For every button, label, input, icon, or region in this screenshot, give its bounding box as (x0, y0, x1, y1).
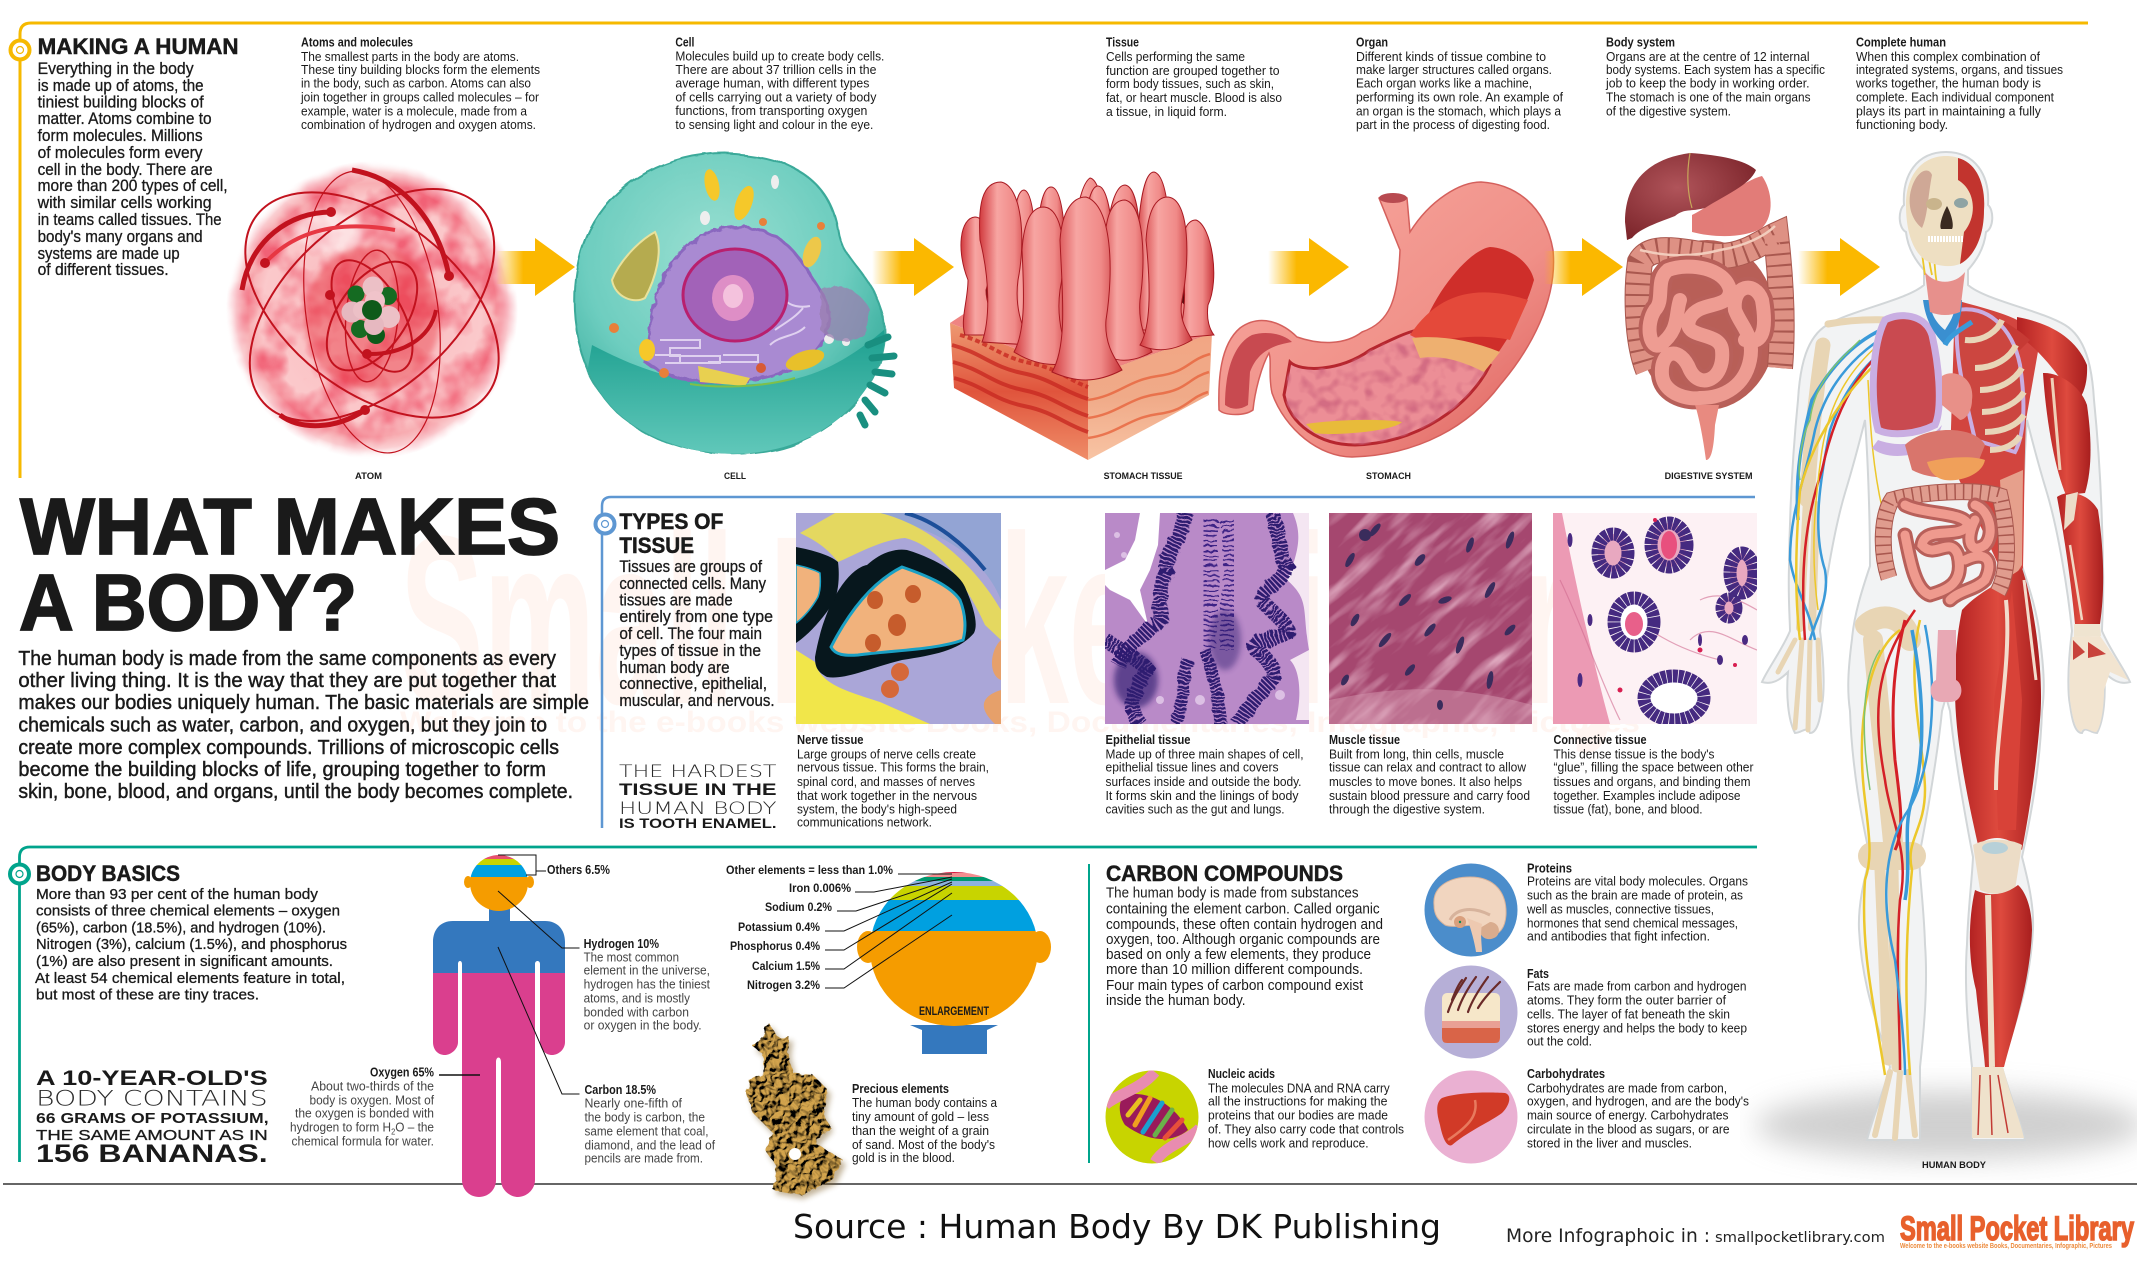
callout: bananas: BODY CONTAINS (36, 1087, 268, 1111)
floor shadow (1755, 1091, 2145, 1159)
photo: nerve tissue (796, 513, 1001, 724)
text block: tissue: Tissue (1106, 36, 1139, 50)
text block: carbohydrates (1527, 1067, 1749, 1150)
panel frame: body basics (10, 847, 1757, 1162)
abdomen organs (1905, 430, 1985, 478)
text block: carbohydrates: stored in the liver and muscles. (1527, 1136, 1692, 1150)
text block: carbohydrates: main source of energy. Carbohydrates (1527, 1108, 1728, 1122)
label: others: Others 6.5% (547, 863, 610, 877)
text block: muscle tissue: through the digestive system. (1329, 803, 1485, 817)
text block: fats: Fats are made from carbon and hydrogen (1527, 980, 1746, 994)
text block: cell: Molecules build up to create body cells. (675, 50, 884, 64)
text block: complete human: functioning body. (1856, 118, 1948, 132)
text block: atoms and molecules: These tiny building blocks form the elements (301, 63, 540, 77)
figure body (433, 908, 565, 1197)
photo: epithelial tissue (1105, 513, 1309, 724)
text block: epithelial tissue: It forms skin and the linings of body (1106, 789, 1299, 803)
main title: WHAT MAKES (20, 482, 560, 571)
text block: organ: an organ is the stomach, which plays a (1356, 105, 1561, 119)
text block: introduction: other living thing. It is the way that they are put together that (18, 670, 556, 692)
text block: proteins: hormones that send chemical messages, (1527, 917, 1738, 931)
text block: making a human intro: form molecules. Millions (38, 127, 203, 145)
text block: carbon compounds: inside the human body. (1106, 993, 1246, 1009)
enlargement labels: Iron 0.006% (789, 883, 851, 895)
icon: DNA (1105, 1070, 1200, 1164)
text block: epithelial tissue (1106, 733, 1304, 817)
text block: carbohydrates: Carbohydrates are made from carbon, (1527, 1082, 1727, 1096)
footer: more infographic link: More Infographoic in : (1506, 1225, 1710, 1247)
colon (1638, 235, 1782, 370)
enlargement neck (910, 1025, 998, 1054)
icon: section marker teal (10, 864, 29, 884)
liver (1625, 153, 1756, 240)
text block: nerve tissue: that work together in the nervous (797, 789, 977, 803)
text block: types of tissue: types of tissue in the (619, 642, 761, 660)
caption: cell: CELL (724, 471, 746, 482)
text block: introduction: makes our bodies uniquely human. The basic materials are simple (18, 692, 589, 714)
text block: making a human intro (37, 60, 228, 279)
text block: tissue (1106, 36, 1282, 119)
text block: atoms and molecules: in the body, such as carbon. Atoms can also (301, 77, 531, 91)
callout lines (439, 855, 580, 1094)
text block: making a human intro: more than 200 types of cell, (38, 177, 228, 195)
caption: stomach tissue: STOMACH TISSUE (1104, 471, 1183, 482)
photo: connective tissue (1553, 513, 1757, 724)
callout: hardest tissue: THE HARDEST (619, 762, 777, 782)
text block: nucleic acids: proteins that our bodies are made (1208, 1108, 1388, 1122)
caption: stomach: STOMACH (1366, 471, 1411, 482)
text block: introduction (18, 648, 589, 803)
text block: atoms and molecules: example, water is a molecule, made from a (301, 105, 527, 119)
label: carbon: pencils are made from. (584, 1152, 703, 1166)
caption: human body: HUMAN BODY (1922, 1160, 1987, 1171)
arrow 3 (1268, 238, 1349, 296)
enlargement labels: Nitrogen 3.2% (747, 980, 820, 992)
label: hydrogen (584, 937, 710, 1032)
heading: types of tissue: TYPES OF (619, 509, 723, 534)
text block: fats (1527, 967, 1747, 1049)
label: carbon: the body is carbon, the (584, 1111, 705, 1125)
label: carbon: diamond, and the lead of (584, 1138, 715, 1152)
enlargement head bands (871, 872, 1037, 1026)
text block: cell: functions, from transporting oxygen (675, 104, 867, 118)
callout: bananas (36, 1067, 269, 1168)
icon: liver (1424, 1070, 1518, 1164)
label: oxygen: Oxygen 65% (370, 1066, 434, 1080)
text block: proteins: well as muscles, connective tissues, (1526, 903, 1714, 917)
label: carbon: same element that coal, (584, 1125, 708, 1139)
footer: more infographic link: smallpocketlibrary.com (1715, 1230, 1885, 1246)
text block: nucleic acids: of. They also carry code that controls (1208, 1122, 1404, 1136)
text block: organ: part in the process of digesting food. (1356, 118, 1550, 132)
text block: making a human intro: Everything in the body (38, 60, 194, 78)
text block: body basics: (65%), carbon (18.5%), and hydrogen (10%). (36, 921, 326, 937)
text block: tissue: form body tissues, such as skin, (1106, 77, 1274, 91)
text block: complete human: plays its part in maintaining a fully (1856, 105, 2042, 119)
text block: precious elements: tiny amount of gold – less (852, 1110, 989, 1124)
text block: introduction: become the building blocks of life, grouping together to form (18, 759, 546, 781)
callout: hardest tissue: HUMAN BODY (619, 799, 776, 819)
text block: body system (1605, 36, 1825, 119)
text block: making a human intro: matter. Atoms combine to (38, 110, 212, 128)
text block: connective tissue: together. Examples include adipose (1554, 789, 1740, 803)
label: hydrogen: element in the universe, (584, 963, 710, 977)
text block: carbohydrates: circulate in the blood as sugars, or are (1527, 1122, 1730, 1136)
enlargement labels: Sodium 0.2% (765, 902, 832, 914)
illustration: cell (570, 153, 900, 470)
text block: precious elements: The human body contains a (852, 1096, 997, 1110)
text block: complete human: integrated systems, organs, and tissues (1856, 63, 2063, 77)
label: oxygen (290, 1066, 434, 1149)
icon: brain (1424, 864, 1518, 956)
text block: precious elements: than the weight of a grain (852, 1124, 989, 1138)
label: hydrogen: atoms, and is mostly (584, 992, 691, 1006)
text block: proteins (1526, 862, 1748, 944)
text block: connective tissue: tissues and organs, and binding them (1554, 775, 1750, 789)
text block: making a human intro: systems are made up (38, 245, 180, 263)
text block: types of tissue: muscular, and nervous. (619, 692, 774, 710)
watermark: Welcome to the e-books website Books, Documentaries, Infographic, Pictures (400, 706, 1640, 739)
text block: body basics (35, 887, 347, 1004)
text block: organ: Organ (1356, 36, 1388, 50)
text block: making a human intro: of molecules form every (38, 144, 203, 162)
enlargement labels: Potassium 0.4% (738, 922, 820, 934)
illustration: stomach (1219, 182, 1554, 457)
text block: atoms and molecules: combination of hydrogen and oxygen atoms. (301, 118, 536, 132)
right arm muscles (2043, 373, 2091, 495)
text block: carbon compounds (1106, 886, 1383, 1009)
text block: making a human intro: body's many organs and (38, 228, 203, 246)
callout: hardest tissue (619, 762, 777, 831)
enlargement labels: Phosphorus 0.4% (730, 941, 820, 953)
text block: making a human intro: with similar cells working (37, 194, 212, 212)
text block: cell: There are about 37 trillion cells in the (675, 63, 876, 77)
icon: section marker blue (596, 514, 614, 534)
chart: human body element composition (290, 855, 715, 1197)
text block: muscle tissue (1329, 733, 1530, 817)
text block: making a human intro: of different tissues. (38, 261, 169, 279)
callout: bananas: 66 GRAMS OF POTASSIUM, (36, 1110, 269, 1127)
text block: tissue: Cells performing the same (1106, 50, 1245, 64)
text block: carbon compounds: Four main types of carbon compound exist (1106, 978, 1363, 994)
text block: precious elements (852, 1082, 997, 1165)
stomach inner wrinkled lining (1284, 329, 1490, 445)
text block: organ: make larger structures called organs. (1356, 63, 1552, 77)
stomach (1692, 176, 1771, 236)
thyroid (1925, 272, 1965, 315)
head (1906, 156, 1984, 266)
icon: section marker yellow (10, 40, 30, 60)
callout: bananas: THE SAME AMOUNT AS IN (36, 1127, 268, 1144)
right lung and ribs (1957, 309, 2023, 452)
text block: connective tissue: “glue”, filling the space between other (1554, 761, 1754, 775)
text block: carbon compounds: The human body is made from substances (1106, 886, 1358, 902)
text block: epithelial tissue: cavities such as the gut and lungs. (1106, 803, 1284, 817)
callout: bananas: A 10-YEAR-OLD'S (36, 1067, 268, 1090)
text block: muscle tissue: Built from long, thin cells, muscle (1329, 748, 1504, 762)
text block: atoms and molecules: join together in groups called molecules – for (300, 91, 539, 105)
left vessels (1790, 175, 1938, 1075)
text block: nucleic acids (1208, 1067, 1404, 1150)
text block: proteins: Proteins (1527, 862, 1572, 876)
text block: types of tissue: Tissues are groups of (619, 558, 762, 576)
text block: nucleic acids: all the instructions for making the (1208, 1095, 1387, 1109)
text block: proteins: and antibodies that fight infection. (1527, 930, 1710, 944)
stomach muscle layers (1420, 247, 1534, 372)
text block: carbon compounds: based on only a few elements, they produce (1106, 947, 1371, 963)
panel frame: types of tissue (596, 497, 1755, 828)
text block: nerve tissue: system, the body's high-speed (797, 803, 957, 817)
text block: muscle tissue: Muscle tissue (1329, 733, 1400, 747)
panel frame: making a human (10, 23, 2088, 478)
text block: carbon compounds: compounds, these often contain hydrogen and (1106, 917, 1383, 933)
text block: nerve tissue: spinal cord, and masses of nerves (797, 775, 975, 789)
tissue block faces (950, 323, 1212, 460)
organelle: golgi (612, 232, 659, 300)
text block: organ: Different kinds of tissue combine to (1356, 50, 1546, 64)
callout: hardest tissue: TISSUE IN THE (619, 780, 776, 799)
text block: body basics: Nitrogen (3%), calcium (1.5%), and phosphorus (36, 937, 347, 953)
enlargement labels (726, 865, 989, 1018)
label: carbon: Carbon 18.5% (584, 1083, 656, 1097)
illustration: gold nugget (747, 1022, 846, 1199)
text block: types of tissue: entirely from one type (619, 608, 773, 626)
text block: nerve tissue: Large groups of nerve cells create (797, 748, 976, 762)
text block: proteins: Proteins are vital body molecules. Organs (1527, 875, 1748, 889)
text block: body system: Body system (1606, 36, 1675, 50)
text block: organ (1356, 36, 1563, 132)
text block: atoms and molecules (300, 36, 540, 132)
text block: types of tissue (619, 558, 774, 710)
text block: body system: The stomach is one of the main organs (1606, 91, 1810, 105)
small intestines in body (1905, 505, 1990, 600)
text block: complete human: works together, the human body is (1855, 77, 2041, 91)
text block: making a human intro: cell in the body. There are (38, 161, 213, 179)
text block: nerve tissue: communications network. (797, 816, 932, 830)
text block: introduction: create more complex compounds. Trillions of microscopic cells (18, 737, 559, 759)
left bones (1778, 320, 1925, 1138)
text block: carbohydrates: Carbohydrates (1527, 1067, 1605, 1081)
right leg muscles (1955, 568, 2041, 850)
nucleus (342, 276, 400, 344)
main title (19, 482, 560, 647)
text block: cell (675, 36, 884, 132)
label: carbon (584, 1083, 715, 1166)
text block: muscle tissue: muscles to move bones. It also helps (1329, 775, 1522, 789)
label: oxygen: About two-thirds of the (311, 1079, 434, 1093)
icon: skin and fat (1424, 966, 1518, 1058)
colon in body (1883, 492, 2006, 592)
text block: connective tissue (1554, 733, 1754, 817)
text block: cell: to sensing light and colour in the eye. (675, 118, 873, 132)
rectum (1695, 405, 1719, 460)
label: hydrogen: or oxygen in the body. (584, 1018, 702, 1032)
text block: epithelial tissue: surfaces inside and outside the body. (1106, 775, 1302, 789)
label: hydrogen: bonded with carbon (584, 1006, 689, 1020)
label: oxygen: hydrogen to form H (290, 1121, 398, 1135)
footer: more infographic link (1506, 1225, 1885, 1247)
label: oxygen: body is oxygen. Most of (310, 1093, 434, 1107)
text block: precious elements: gold is in the blood. (852, 1151, 955, 1165)
text block: making a human intro: is made up of atoms, the (38, 77, 204, 95)
text block: atoms and molecules: The smallest parts in the body are atoms. (301, 50, 519, 64)
text block: introduction: chemicals such as water, carbon, and oxygen, but they join to (18, 715, 547, 737)
text block: nerve tissue: nervous tissue. This forms the brain, (797, 761, 989, 775)
text block: body basics: At least 54 chemical elements feature in total, (35, 971, 345, 987)
label: oxygen: chemical formula for water. (292, 1135, 434, 1149)
callout: hardest tissue: IS TOOTH ENAMEL. (619, 815, 776, 831)
text block: epithelial tissue: Made up of three main shapes of cell, (1106, 748, 1304, 762)
text block: fats: out the cold. (1527, 1035, 1592, 1049)
text block: making a human intro: tiniest building blocks of (38, 94, 204, 112)
figure head (464, 855, 535, 911)
arrow 4 (1544, 238, 1623, 296)
text block: body basics: More than 93 per cent of the human body (36, 887, 319, 903)
text block: body system: of the digestive system. (1606, 105, 1731, 119)
text block: carbon compounds: containing the element carbon. Called organic (1106, 901, 1380, 917)
leader lines (825, 874, 952, 988)
caption: atom: ATOM (355, 471, 382, 482)
text block: body basics: consists of three chemical elements – oxygen (36, 904, 340, 920)
text block: precious elements: of sand. Most of the body's (852, 1138, 995, 1152)
right trunk muscle (1950, 300, 2040, 590)
text block: cell: of cells carrying out a variety of body (675, 91, 877, 105)
heading: making a human: MAKING A HUMAN (38, 34, 239, 59)
text block: introduction: skin, bone, blood, and organs, until the body becomes complete. (18, 781, 573, 803)
text block: complete human: Complete human (1856, 36, 1946, 50)
enlargement ears (857, 931, 1051, 963)
main title: A BODY? (19, 558, 357, 647)
heading: types of tissue: TISSUE (619, 533, 694, 558)
text block: introduction: The human body is made from the same components as every (18, 648, 556, 670)
small intestine (1650, 267, 1764, 398)
text block: types of tissue: of cell. The four main (619, 625, 762, 643)
text block: body basics: (1%) are also present in significant amounts. (36, 954, 333, 970)
text block: body system: body systems. Each system has a specific (1606, 63, 1825, 77)
heading: body basics: BODY BASICS (36, 861, 180, 886)
text block: proteins: such as the brain are made of protein, as (1527, 889, 1743, 903)
left lung (1873, 316, 1939, 434)
arrow 5 (1798, 238, 1880, 296)
illustration: human body (1755, 152, 2145, 1159)
text block: types of tissue: connective, epithelial, (619, 675, 767, 693)
text block: epithelial tissue: Epithelial tissue (1106, 733, 1190, 747)
text block: nucleic acids: Nucleic acids (1208, 1067, 1275, 1081)
heart and great vessels (1942, 373, 1972, 420)
text block: cell: average human, with different types (675, 77, 869, 91)
heading: types of tissue (619, 509, 723, 558)
text block: fats: stores energy and helps the body to keep (1527, 1022, 1747, 1036)
illustration: atom (228, 162, 517, 456)
text block: precious elements: Precious elements (852, 1082, 949, 1096)
text block: tissue: fat, or heart muscle. Blood is also (1106, 91, 1282, 105)
callout: bananas: 156 BANANAS. (36, 1140, 268, 1168)
backing (1637, 240, 1777, 410)
label: oxygen: O – the (395, 1121, 434, 1135)
illustration: digestive system (1625, 153, 1782, 460)
label: oxygen: 2 (391, 1128, 396, 1137)
text block: carbon compounds: oxygen, too. Although organic compounds are (1106, 932, 1380, 948)
chart: enlargement of head (726, 865, 1051, 1054)
enlargement labels: Calcium 1.5% (752, 961, 820, 973)
text block: connective tissue: This dense tissue is the body's (1554, 748, 1714, 762)
text block: tissue: a tissue, in liquid form. (1106, 105, 1227, 119)
enlargement labels: ENLARGEMENT (919, 1006, 989, 1018)
text block: muscle tissue: sustain blood pressure and carry food (1329, 789, 1530, 803)
footer: source: Source : Human Body By DK Publishing (793, 1207, 1441, 1246)
duodenum inner (1225, 333, 1292, 409)
logo: small pocket library: Welcome to the e-books website Books, Documentaries, Infographic, Pictures (1900, 1243, 2112, 1250)
text block: nucleic acids: The molecules DNA and RNA carry (1208, 1082, 1390, 1096)
label: hydrogen: hydrogen has the tiniest (584, 977, 710, 991)
text block: connective tissue: tissue (fat), bone, and blood. (1554, 803, 1702, 817)
label: hydrogen: Hydrogen 10% (584, 937, 659, 951)
heading: carbon compounds: CARBON COMPOUNDS (1106, 861, 1343, 886)
arrow 2 (872, 238, 954, 296)
text block: complete human: When this complex combination of (1856, 50, 2040, 64)
label: hydrogen: The most common (584, 951, 679, 965)
photo: muscle tissue (1329, 513, 1532, 724)
text block: body system: Organs are at the centre of 12 internal (1606, 50, 1810, 64)
text block: fats: Fats (1527, 967, 1549, 981)
genitals (1931, 630, 1961, 702)
label: carbon: Nearly one-fifth of (584, 1097, 682, 1111)
illustration: stomach tissue (950, 172, 1214, 460)
text block: cell: Cell (675, 36, 694, 50)
text block: organ: performing its own role. An example of (1356, 91, 1563, 105)
text block: epithelial tissue: epithelial tissue lines and covers (1106, 761, 1278, 775)
text block: carbon compounds: more than 10 million different compounds. (1106, 962, 1363, 978)
text block: fats: atoms. They form the outer barrier of (1527, 994, 1726, 1008)
enlargement labels: Other elements = less than 1.0% (726, 865, 893, 877)
text block: connective tissue: Connective tissue (1554, 733, 1646, 747)
label: oxygen: the oxygen is bonded with (295, 1107, 434, 1121)
text block: tissue: function are grouped together to (1106, 64, 1280, 78)
text block: nerve tissue (797, 733, 989, 830)
text block: atoms and molecules: Atoms and molecules (301, 36, 413, 50)
caption: digestive system: DIGESTIVE SYSTEM (1665, 471, 1753, 482)
text block: types of tissue: human body are (619, 659, 730, 677)
text block: body system: job to keep the body in working order. (1605, 77, 1810, 91)
silhouette (1762, 152, 2130, 1140)
text block: organ: Each organ works like a machine, (1356, 77, 1532, 91)
text block: muscle tissue: tissue can relax and contract to allow (1329, 761, 1527, 775)
text block: nucleic acids: how cells work and reproduce. (1208, 1136, 1369, 1150)
text block: complete human (1855, 36, 2063, 132)
text block: nerve tissue: Nerve tissue (797, 733, 864, 747)
text block: making a human intro: in teams called tissues. The (38, 211, 222, 229)
text block: carbohydrates: oxygen, and hydrogen, and are the body's (1527, 1095, 1749, 1109)
arrow 1 (496, 238, 575, 296)
cilia (860, 337, 894, 425)
text block: types of tissue: connected cells. Many (619, 575, 767, 593)
text block: types of tissue: tissues are made (619, 592, 733, 610)
text block: fats: cells. The layer of fat beneath the skin (1527, 1008, 1730, 1022)
text block: body basics: but most of these are tiny traces. (36, 988, 259, 1004)
text block: complete human: complete. Each individual component (1856, 91, 2054, 105)
